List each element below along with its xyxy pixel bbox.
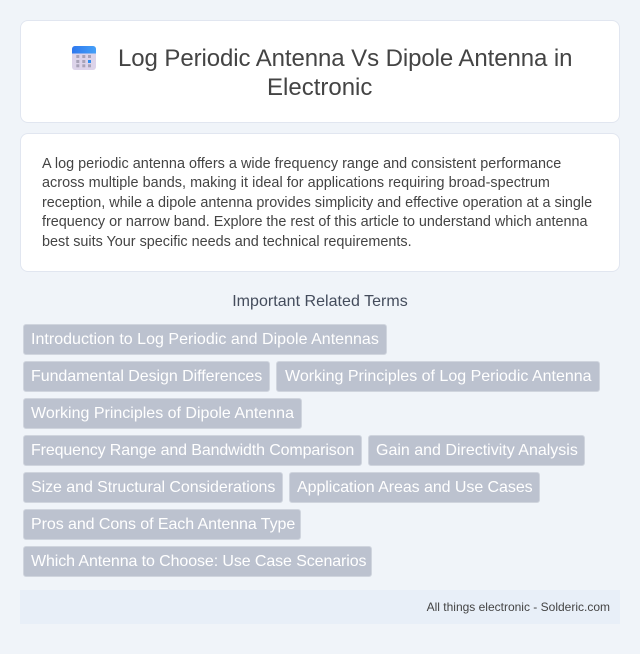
tag	[23, 398, 302, 429]
icon: calendar	[72, 46, 96, 70]
tag	[23, 472, 283, 503]
tag	[23, 361, 270, 392]
text block: description: A log periodic antenna offers a wide frequency range and consistent performance	[42, 156, 561, 172]
heading: related terms: Important Related Terms	[232, 293, 408, 310]
tag	[368, 435, 585, 466]
title: Electronic	[267, 74, 372, 101]
tag list	[23, 324, 600, 577]
tag: Working Principles of Log Periodic Antenna	[285, 368, 592, 385]
tag	[23, 546, 372, 577]
tag: Working Principles of Dipole Antenna	[31, 405, 294, 422]
tag: Pros and Cons of Each Antenna Type	[31, 516, 295, 533]
tag	[23, 435, 362, 466]
tag	[276, 361, 600, 392]
panel: description	[20, 133, 620, 272]
tag	[289, 472, 540, 503]
tag: Size and Structural Considerations	[31, 479, 275, 496]
title	[118, 45, 572, 101]
tag: Application Areas and Use Cases	[297, 479, 533, 496]
tag: Which Antenna to Choose: Use Case Scenarios	[31, 553, 366, 570]
footer	[20, 590, 620, 624]
tag: Gain and Directivity Analysis	[376, 442, 578, 459]
footer text: All things electronic - Solderic.com	[427, 600, 610, 614]
text block: description: across multiple bands, making it ideal for applications requiring broad-spectrum	[42, 175, 550, 191]
tag: Introduction to Log Periodic and Dipole Antennas	[31, 331, 379, 348]
tag	[23, 324, 387, 355]
tag: Fundamental Design Differences	[31, 368, 262, 385]
tag	[23, 509, 301, 540]
text block: description: best suits Your specific needs and technical requirements.	[42, 234, 412, 250]
text block: description	[42, 156, 592, 250]
title: Log Periodic Antenna Vs Dipole Antenna in	[118, 45, 572, 72]
text block: description: reception, while a dipole antenna provides simplicity and effective operation at a single	[42, 195, 592, 211]
text block: description: frequency or narrow band. Explore the rest of this article to understand which antenna	[42, 214, 588, 230]
panel: title card	[20, 20, 620, 123]
tag: Frequency Range and Bandwidth Comparison	[31, 442, 354, 459]
